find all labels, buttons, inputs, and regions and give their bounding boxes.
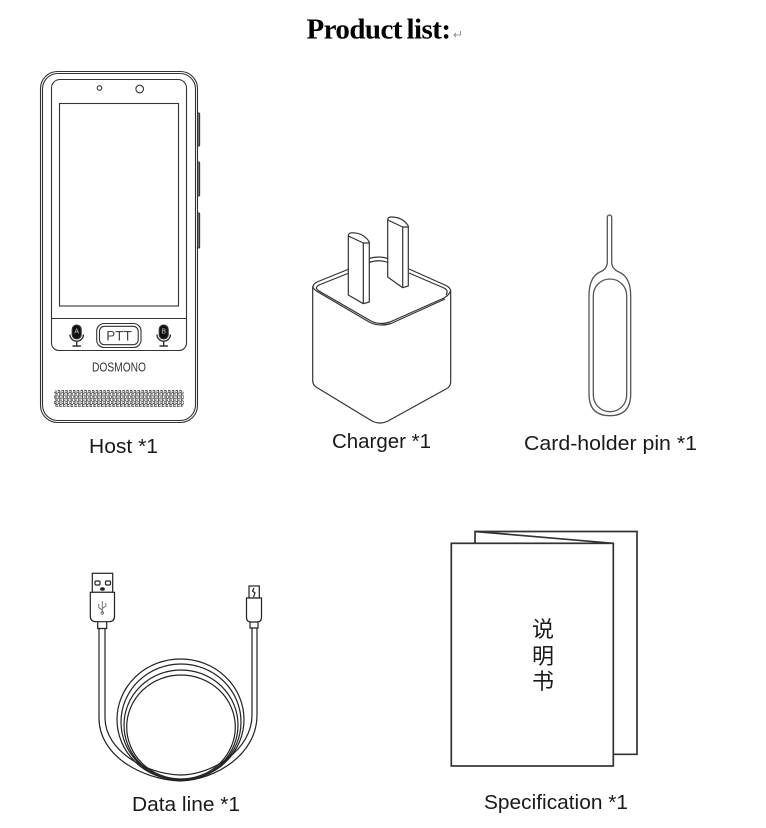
microphone A: A [74,328,79,336]
microphone B: B [161,328,166,336]
PTT button [97,324,141,348]
microphone B [157,325,170,346]
front cameras [97,85,144,93]
label: host: Host *1 [89,436,158,458]
label: data line: Data line *1 [132,794,240,816]
speaker grille [54,390,184,407]
icon: charger [313,217,451,423]
side buttons [197,113,200,248]
booklet title [532,617,554,694]
booklet title: 说 [532,617,554,642]
icon: specification booklet [451,532,637,766]
booklet title: 书 [532,669,554,694]
icon: host device [40,72,200,422]
title: Product list: [306,13,451,45]
device body [40,72,198,422]
cable ends [99,628,257,781]
right prong [388,217,408,288]
collar arc [369,257,388,262]
micro USB plug [246,586,262,628]
PTT button: PTT [106,328,132,344]
cable coils [117,659,244,780]
left prong [348,233,369,304]
top face rim [313,273,451,325]
charger body [313,269,451,423]
icon: card-holder pin [589,215,631,416]
front panel [52,80,186,350]
microphone A [70,325,83,346]
booklet title: 明 [532,644,554,669]
front page [451,543,613,766]
USB plug [90,573,114,628]
icon: data line [90,573,262,781]
label: specification: Specification *1 [484,792,628,814]
label: card-holder pin: Card-holder pin *1 [524,433,697,455]
screen [60,104,178,306]
brand name: DOSMONO [92,360,146,374]
back page [475,532,637,754]
label: charger: Charger *1 [332,431,431,453]
